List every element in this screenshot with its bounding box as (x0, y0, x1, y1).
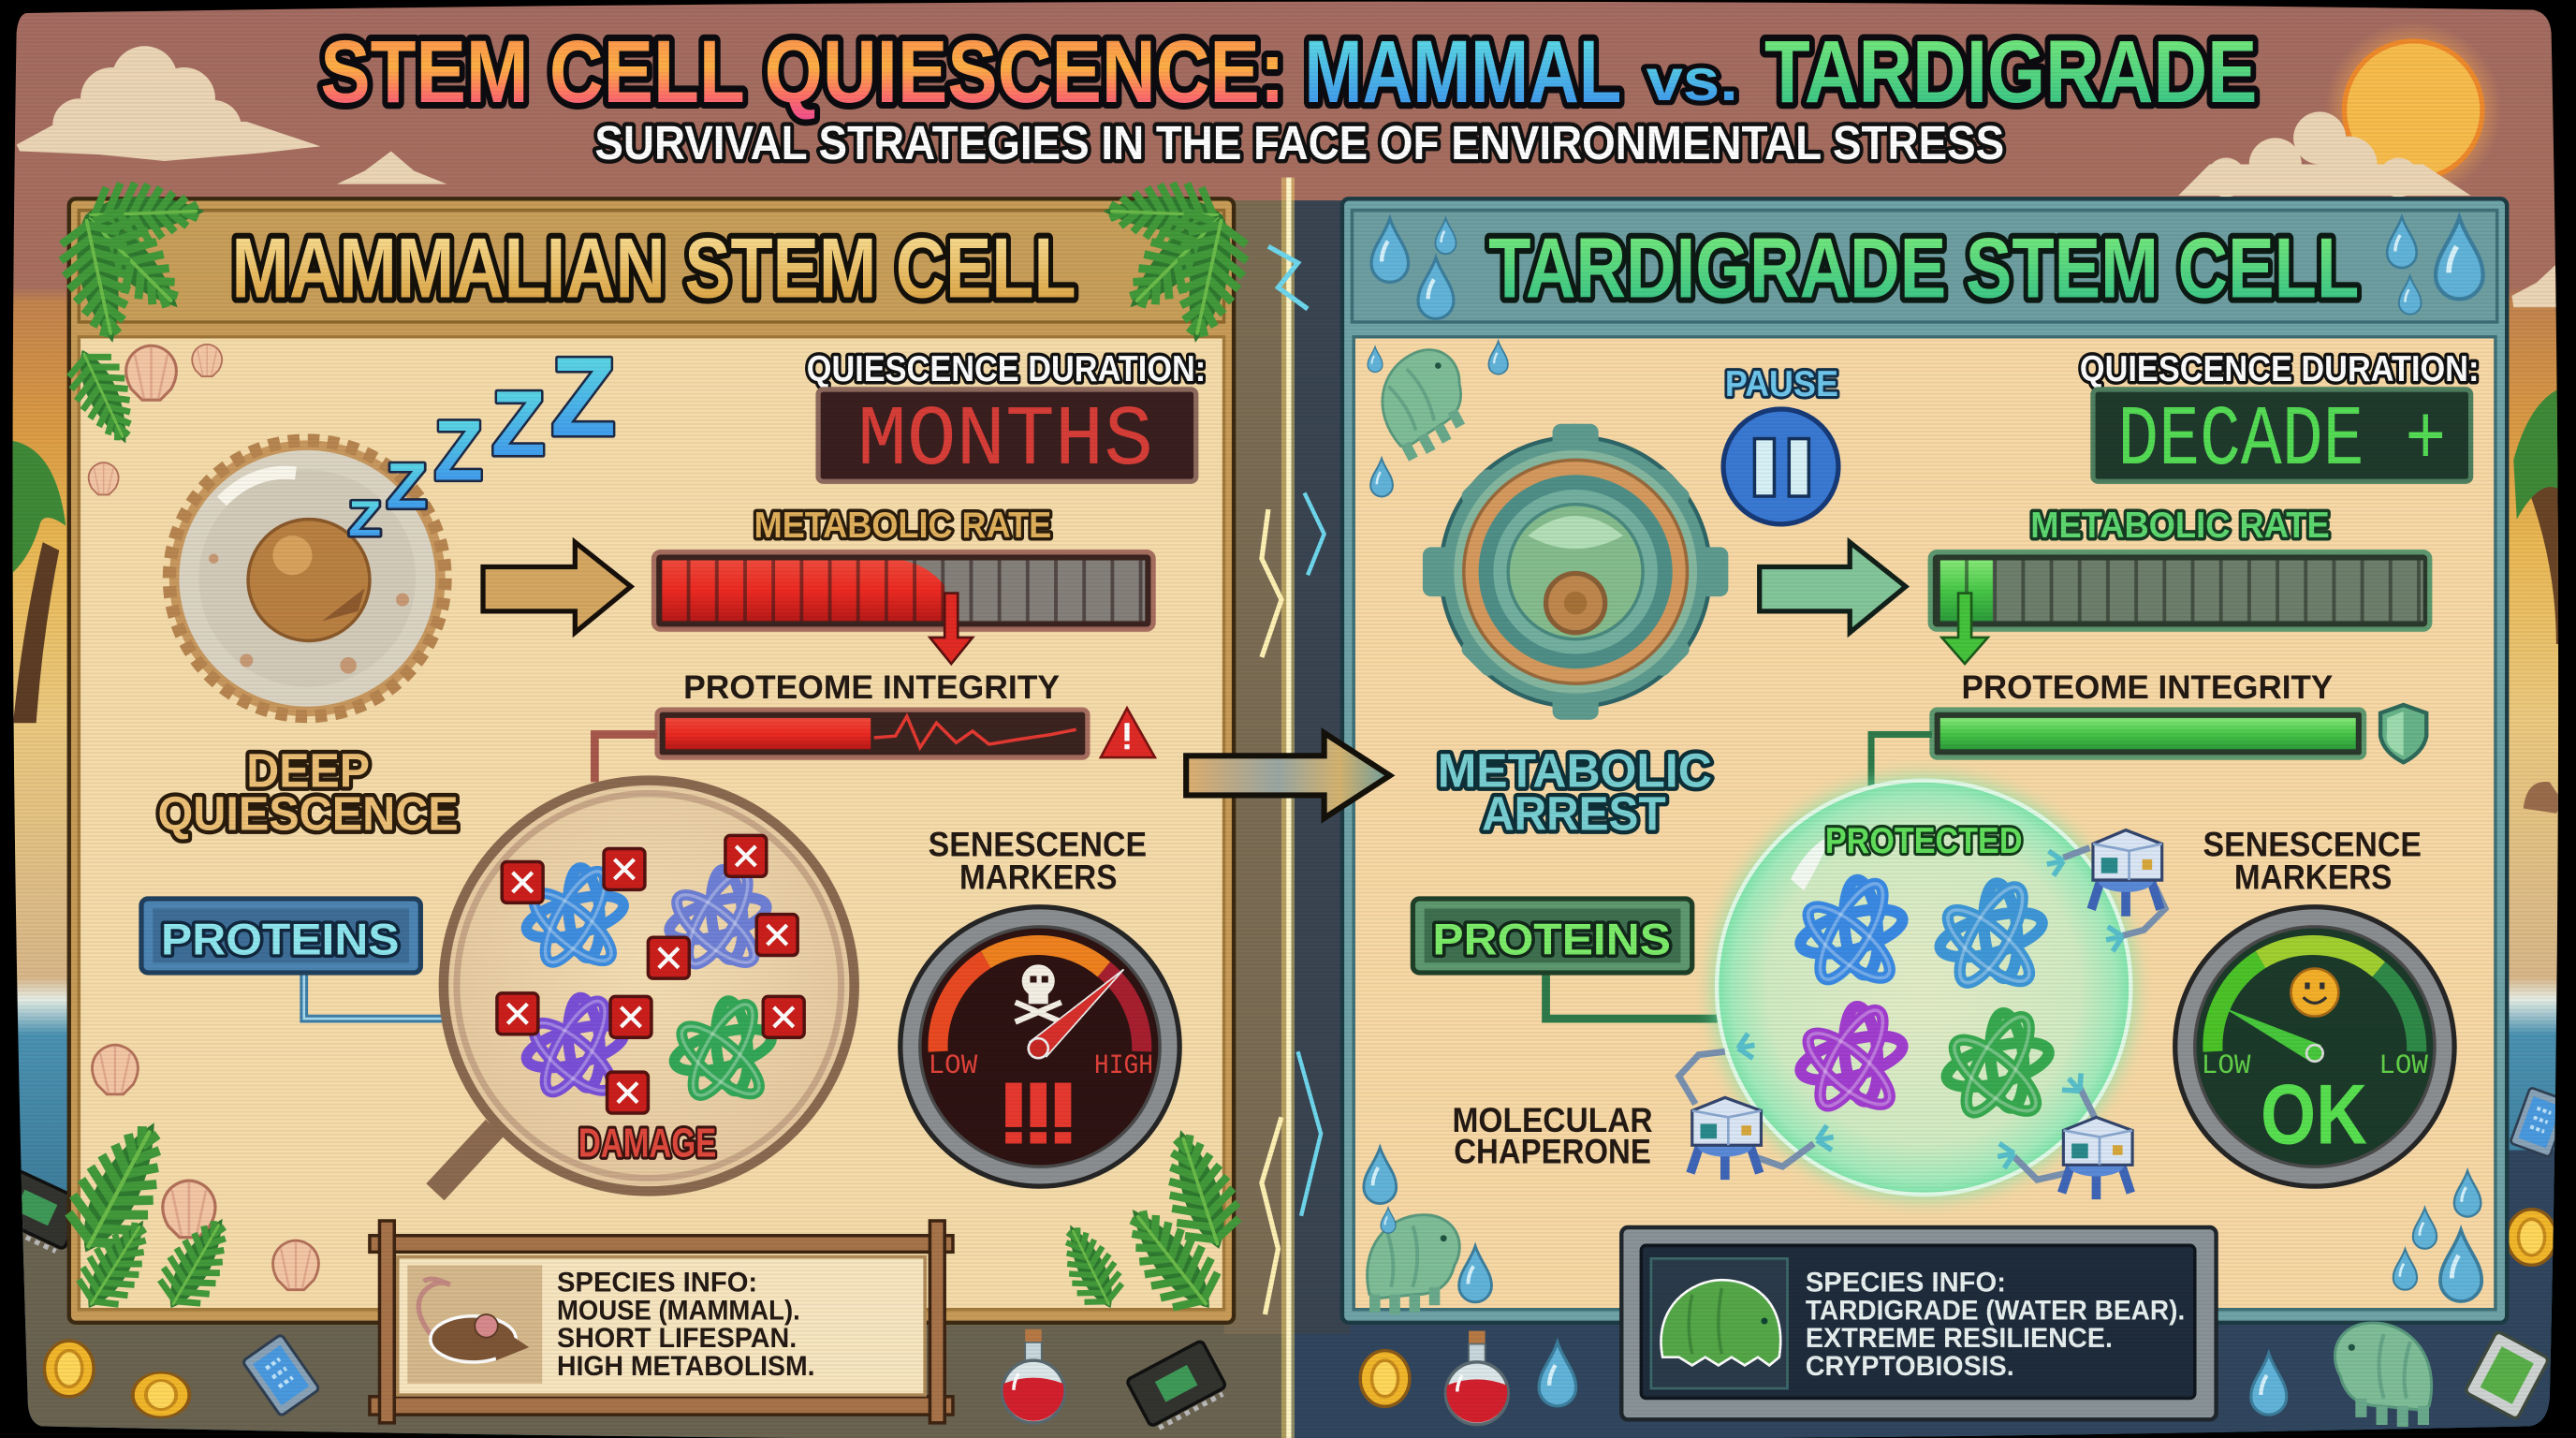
icon: side palm frond (66, 350, 132, 444)
icon: drops bottom left (1364, 1148, 1491, 1302)
icon: ferns bottom left (65, 1123, 227, 1308)
icon: potion bottom left (1003, 1329, 1064, 1423)
heading: MAMMALIAN STEM CELL (232, 221, 1076, 316)
connector: proteins to magnifier (304, 973, 444, 1019)
label: senescence markers: MARKERS (2234, 858, 2392, 896)
title: mammal: MAMMAL (1305, 22, 1621, 122)
header band (79, 211, 1224, 322)
damaged protein: green (670, 997, 776, 1105)
bar: metabolic rate high (654, 552, 1153, 629)
icon: cloud right (2178, 111, 2576, 307)
icon: skull (1016, 964, 1061, 1022)
label: damage: DAMAGE (578, 1121, 716, 1167)
icon: tardigrade portrait (1651, 1258, 1788, 1388)
wooden frame (370, 1221, 953, 1423)
icon: coins bottom left (44, 1341, 189, 1417)
icon: sleeping z letters: Z (348, 492, 381, 547)
label: senescence markers (2203, 825, 2422, 896)
icon: chip left edge (21, 1170, 67, 1254)
damaged protein: indigo (666, 865, 770, 973)
arrow: metabolic drop (1942, 594, 1988, 664)
icon: drops top left (1368, 341, 1508, 496)
icon: pause button (1723, 409, 1838, 524)
icon: mouse (407, 1265, 542, 1384)
icon: drops header right (2387, 217, 2483, 315)
label: pause: PAUSE (1725, 364, 1838, 404)
icon: shells lower left (92, 1045, 318, 1290)
icon: palm leaves header left (52, 181, 206, 349)
bubble (1717, 781, 2130, 1195)
label: proteins (1412, 899, 1692, 973)
gauge labels: HIGH (1094, 1049, 1153, 1081)
icon: shells top left (89, 345, 222, 494)
icon: chaperone robot left (1679, 1034, 1834, 1180)
icon: sleeping z letters: Z (550, 335, 616, 460)
parchment (398, 1257, 925, 1395)
arrow: mammal to tardigrade (1186, 733, 1390, 818)
species text: TARDIGRADE (WATER BEAR). (1806, 1295, 2185, 1326)
icon: card bottom right (2465, 1331, 2549, 1419)
label: molecular chaperone: CHAPERONE (1454, 1133, 1651, 1171)
label: metabolic arrest (1438, 744, 1712, 840)
connector: proteome to magnifier (594, 734, 657, 782)
icon: sleeping stem cell (169, 440, 446, 716)
icon: sun (2330, 26, 2497, 183)
icon: palm right (2513, 389, 2559, 644)
species card: tardigrade (1621, 1227, 2217, 1419)
arrow: cell to metabolic rate (483, 542, 631, 633)
icon: palm left (10, 440, 66, 723)
label: deep quiescence: DEEP (246, 744, 370, 798)
icon: tardigrade bottom left (1368, 1215, 1459, 1314)
icon: large cloud left (17, 46, 446, 184)
display: decade plus: DECADE + (2117, 393, 2446, 490)
species text (1806, 1267, 2185, 1382)
icon: water drops bottom (1539, 1343, 2287, 1415)
icon: shield (2380, 705, 2426, 762)
protected protein: sky (1936, 879, 2046, 992)
icon: tardigrade top left (1363, 339, 1486, 464)
gauge needle (1030, 969, 1123, 1056)
label: proteins: PROTEINS (161, 916, 400, 965)
icon: smiley (2291, 969, 2338, 1016)
dark screen (1641, 1245, 2195, 1399)
magnifier handle (444, 1137, 487, 1183)
icon: sleeping z letters: Z (433, 403, 483, 498)
connector: proteome to bubble (1871, 734, 1932, 792)
label: senescence markers: SENESCENCE (929, 825, 1147, 863)
label: proteome integrity: PROTEOME INTEGRITY (1962, 669, 2333, 706)
icon: chaperone robot top (2047, 830, 2165, 951)
icon: ferns bottom right (1065, 1130, 1241, 1312)
arrow: cell to metabolic rate (1760, 542, 1906, 633)
display: months: MONTHS (857, 393, 1153, 490)
title: stem cell quiescence: STEM CELL QUIESCENCE: (320, 22, 1284, 122)
gauge: senescence low (2175, 907, 2454, 1186)
label: quiescence duration: QUIESCENCE DURATION: (807, 349, 1206, 389)
centre gutter, tardigrade side (1288, 200, 1351, 1334)
content area (79, 337, 1224, 1310)
bar: proteome integrity damaged (657, 710, 1088, 757)
panel: tardigrade stem cell (1342, 198, 2507, 1323)
species text: SPECIES INFO: (557, 1267, 757, 1298)
icon: chip right edge (2510, 1087, 2555, 1157)
protected protein: blue (1796, 875, 1907, 989)
species text: HIGH METABOLISM. (557, 1351, 815, 1382)
label: senescence markers: SENESCENCE (2203, 825, 2422, 863)
bubble glow (1710, 774, 2137, 1201)
centre gutter, mammal side (1224, 200, 1288, 1334)
right lower strip (1288, 1151, 2576, 1438)
title (320, 22, 2257, 122)
label: quiescence duration: QUIESCENCE DURATION: (2080, 349, 2479, 389)
gauge labels (929, 1049, 1153, 1081)
species text: MOUSE (MAMMAL). (557, 1295, 800, 1326)
species text: SPECIES INFO: (1806, 1267, 2006, 1298)
icon: magnifier with damaged proteins (444, 781, 855, 1191)
label: proteins: PROTEINS (1432, 916, 1671, 965)
gauge labels: LOW (2378, 1049, 2428, 1081)
species text: CRYPTOBIOSIS. (1806, 1351, 2014, 1382)
label: metabolic arrest: METABOLIC (1438, 744, 1712, 798)
label: metabolic rate: METABOLIC RATE (2030, 506, 2330, 546)
label: deep quiescence: QUIESCENCE (158, 786, 459, 840)
icon: coin right edge (2507, 1210, 2556, 1265)
left lower strip (0, 1224, 1288, 1438)
species text: EXTREME RESILIENCE. (1806, 1323, 2113, 1354)
icon: coin bottom right (1360, 1351, 1410, 1406)
icon: sleeping z letters (346, 356, 616, 538)
protected protein: green (1942, 1008, 2053, 1122)
icon: chip bottom left (1126, 1341, 1229, 1431)
label: protected: PROTECTED (1825, 821, 2022, 861)
magnifier lens (444, 781, 855, 1191)
icon: protective bubble with proteins (1710, 774, 2137, 1201)
species text (557, 1267, 815, 1382)
gauge needle (2223, 1007, 2321, 1062)
icon: warning triangle (1101, 708, 1155, 757)
gauge labels: LOW (929, 1049, 977, 1081)
bar: metabolic rate low (1930, 552, 2430, 629)
content area (1354, 337, 2496, 1310)
label: molecular chaperone: MOLECULAR (1453, 1101, 1653, 1139)
protected protein: magenta (1796, 1002, 1907, 1115)
title: tardigrade: TARDIGRADE (1764, 22, 2257, 122)
species text: SHORT LIFESPAN. (557, 1323, 797, 1354)
damaged protein: purple (522, 993, 628, 1101)
status ok: OK (2261, 1066, 2367, 1162)
connector: proteins to bubble (1546, 973, 1719, 1019)
header band (1352, 211, 2497, 322)
label: metabolic rate: METABOLIC RATE (754, 506, 1051, 546)
panel frame (69, 198, 1234, 1323)
label: senescence markers (929, 825, 1147, 896)
icon: potion bottom right (1445, 1331, 1508, 1425)
metal frame (1621, 1227, 2217, 1419)
label: proteins (141, 899, 420, 973)
alert marks (1005, 1083, 1071, 1143)
species card: mouse (370, 1221, 953, 1423)
gauge labels: LOW (2202, 1049, 2251, 1081)
label: proteome integrity: PROTEOME INTEGRITY (683, 669, 1060, 706)
arrow: metabolic drop (929, 594, 973, 664)
icon: data card bottom left (242, 1334, 319, 1416)
icon: drops bottom right (2393, 1171, 2481, 1301)
label: metabolic arrest: ARREST (1482, 786, 1666, 840)
label: deep quiescence (158, 744, 459, 840)
panel frame (1342, 198, 2507, 1323)
gauge labels (2202, 1049, 2428, 1081)
icon: drops header left (1371, 218, 1456, 318)
icon: sleeping z letters: Z (386, 449, 427, 521)
icon: arrested stem cell (1423, 424, 1728, 720)
gauge: senescence high (900, 907, 1179, 1186)
icon: tardigrade bottom (2334, 1323, 2432, 1427)
title: versus: vs. (1647, 48, 1738, 113)
icon: sleeping z letters: Z (491, 372, 546, 475)
icon: rock (2524, 782, 2558, 814)
icon: chaperone robot right (1998, 1072, 2132, 1199)
label: senescence markers: MARKERS (959, 858, 1117, 896)
panel: mammalian stem cell (52, 181, 1255, 1328)
heading: TARDIGRADE STEM CELL (1488, 221, 2359, 316)
bar: proteome integrity intact (1932, 710, 2364, 757)
subtitle: SURVIVAL STRATEGIES IN THE FACE OF ENVIRONMENTAL STRESS (594, 116, 2004, 169)
icon: palm leaves header right (1102, 181, 1255, 349)
damage markers (497, 835, 804, 1113)
centre divider with lightning (1262, 178, 1325, 1438)
damaged protein: blue (522, 863, 628, 971)
label: molecular chaperone (1453, 1101, 1653, 1171)
